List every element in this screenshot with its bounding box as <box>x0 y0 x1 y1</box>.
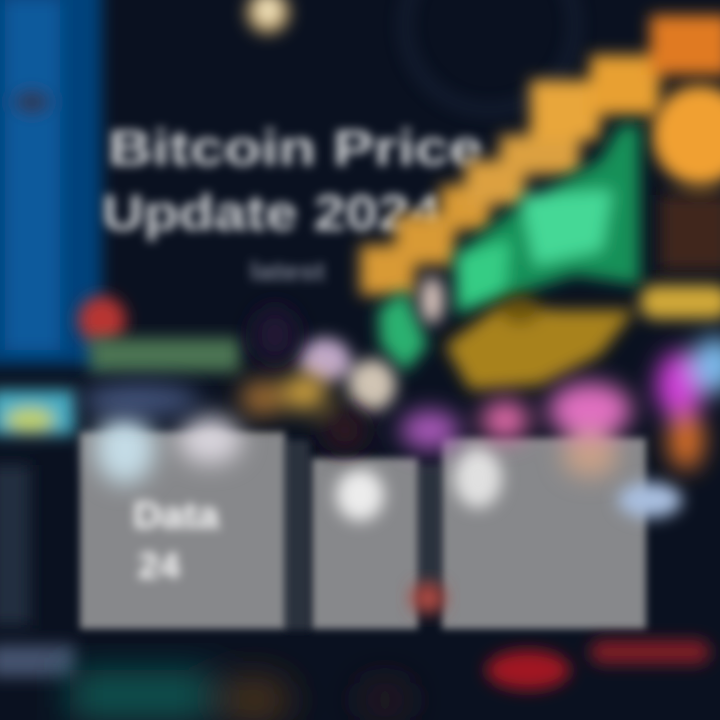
colour strip left <box>0 390 75 677</box>
colourful ribbon <box>80 337 720 477</box>
icon: gold emblem <box>445 285 720 390</box>
dark dividers between cards <box>284 440 442 630</box>
chart: white highlights <box>299 276 444 411</box>
chart: rising orange staircase band <box>360 15 720 295</box>
title <box>102 120 483 241</box>
text block: left card text: Data <box>133 495 220 537</box>
text block: left card text <box>133 495 220 586</box>
icon: top glowing light <box>246 0 290 34</box>
decorative ring <box>405 0 575 110</box>
red icon <box>78 296 126 344</box>
chart: green rising area <box>378 125 640 372</box>
panel: middle grey card <box>312 458 418 629</box>
title: Update 2024 <box>102 185 442 241</box>
card icons <box>95 412 242 484</box>
green label <box>90 338 240 372</box>
subtitle: latest <box>250 256 325 286</box>
chart: orange blob top right <box>652 85 720 270</box>
text block: left card text: 24 <box>138 545 180 586</box>
dark purple patch <box>253 307 297 363</box>
title: Bitcoin Price <box>108 120 483 176</box>
red marker <box>410 582 446 614</box>
panel: right grey card <box>442 438 682 629</box>
card highlight <box>336 469 384 521</box>
panel: left grey card <box>80 412 285 629</box>
bottom red accents <box>486 640 710 690</box>
card highlights <box>454 448 682 518</box>
bottom teal and brown patches <box>70 670 410 720</box>
panel: left blue column <box>0 0 102 365</box>
